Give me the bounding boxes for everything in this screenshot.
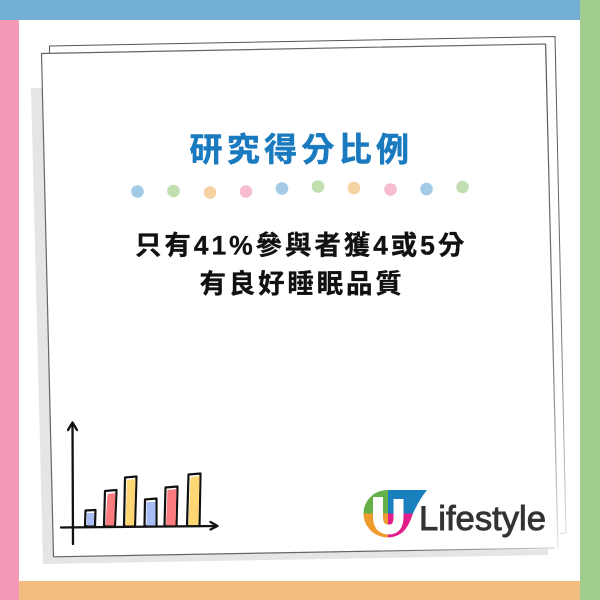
back paper sheet bbox=[50, 36, 566, 550]
bar 3 yellow bbox=[124, 476, 136, 526]
text: body line 1: 只有41%參與者獲4或5分 bbox=[135, 230, 467, 260]
bar 4 blue bbox=[144, 498, 156, 526]
row of pastel dots bbox=[131, 180, 469, 199]
border: right green bar bbox=[580, 0, 600, 600]
white U bbox=[378, 497, 398, 530]
bar 2 red bbox=[104, 490, 116, 526]
bar 6 yellow bbox=[187, 474, 200, 526]
logo: U Lifestyle bbox=[364, 490, 546, 538]
title: 研究得分比例 bbox=[190, 131, 413, 168]
bar 5 red bbox=[164, 486, 178, 526]
border: bottom orange bar bbox=[19, 581, 580, 600]
y axis arrow bbox=[68, 422, 77, 544]
x axis arrow bbox=[61, 522, 218, 530]
text: body line 2: 有良好睡眠品質 bbox=[200, 269, 405, 299]
bar 1 blue bbox=[85, 510, 96, 526]
logo mark bbox=[364, 490, 427, 538]
icon: hand-drawn bar chart bbox=[61, 422, 218, 544]
paper shadow bbox=[31, 88, 548, 564]
front paper sheet bbox=[42, 44, 558, 557]
logo wordmark: Lifestyle bbox=[419, 500, 546, 538]
border: left pink bar bbox=[0, 20, 19, 600]
border: top blue bar bbox=[0, 0, 580, 20]
